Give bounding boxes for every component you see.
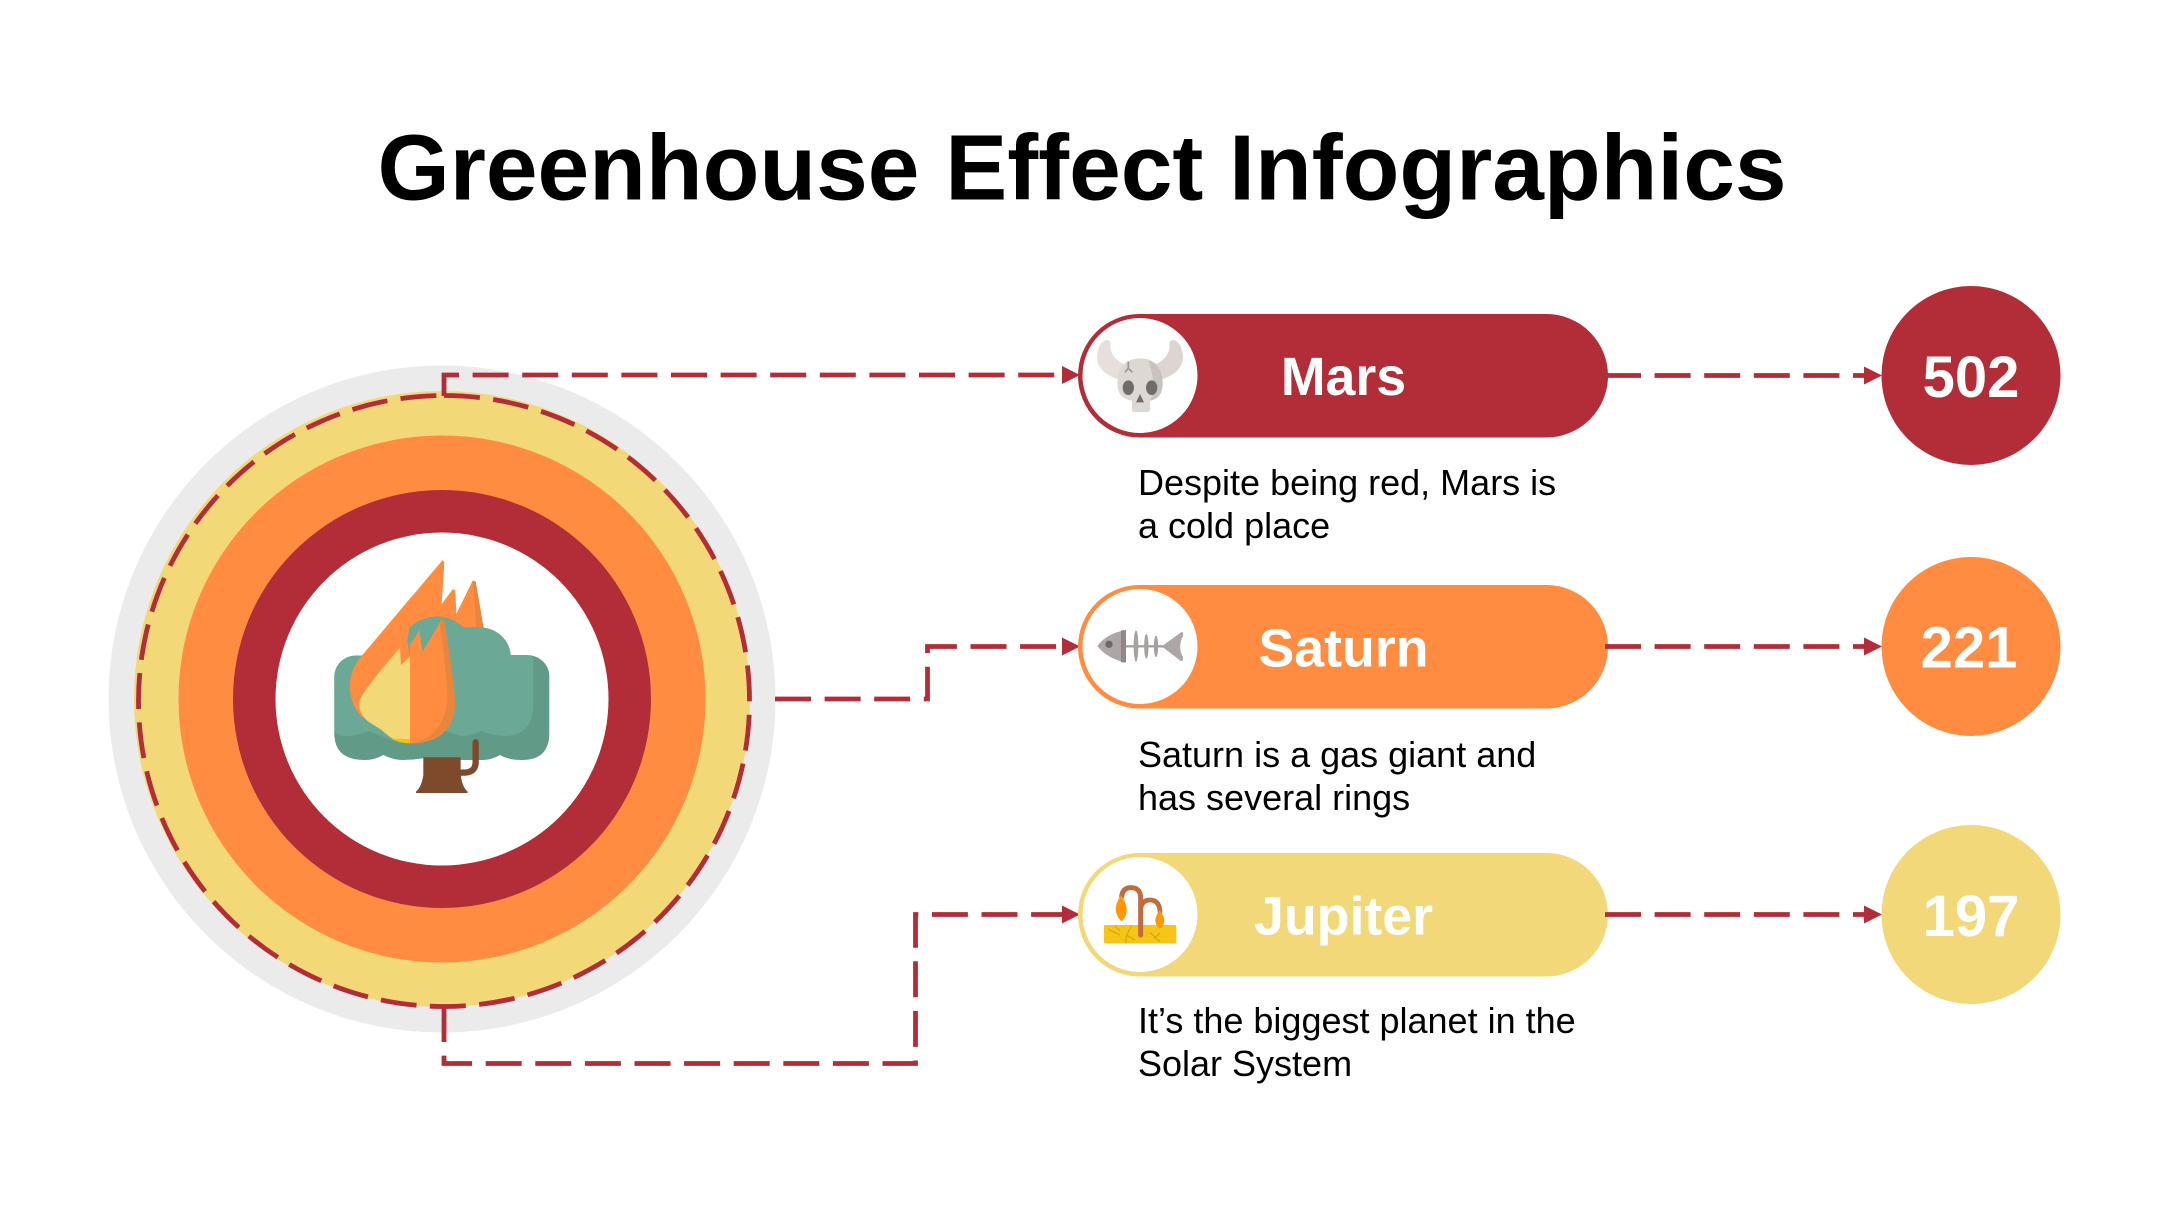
panel: Mars (1078, 286, 2060, 546)
Jupiter description (1138, 1000, 1576, 1084)
Saturn description: has several rings (1138, 777, 1410, 818)
Saturn description (1138, 734, 1536, 818)
Mars value: 502 (1923, 345, 2019, 410)
connector: target to Jupiter (444, 906, 1080, 1064)
Mars description: Despite being red, Mars is (1138, 462, 1556, 503)
Mars connector to value (1605, 366, 1882, 384)
Mars description (1138, 462, 1556, 546)
connector: target to Mars (444, 366, 1080, 396)
Jupiter pill (1078, 853, 1608, 976)
Mars value (1882, 286, 2060, 465)
icon: wilted plant (1082, 857, 1198, 972)
Mars label: Mars (1281, 347, 1406, 407)
Saturn connector to value (1605, 638, 1882, 656)
Jupiter label: Jupiter (1254, 886, 1433, 946)
Saturn value: 221 (1921, 616, 2017, 680)
title: Greenhouse Effect Infographics (377, 116, 1787, 220)
Saturn pill (1078, 585, 1608, 708)
Saturn description: Saturn is a gas giant and (1138, 734, 1536, 775)
icon: horned skull (1082, 318, 1198, 433)
Saturn value (1882, 557, 2060, 736)
Jupiter connector to value (1605, 906, 1882, 924)
panel: Saturn (1078, 557, 2060, 818)
concentric target diagram (108, 366, 776, 1032)
Jupiter value: 197 (1923, 884, 2019, 949)
Saturn label: Saturn (1258, 618, 1429, 678)
panel: Jupiter (1078, 825, 2060, 1084)
icon: burning tree (334, 560, 549, 793)
icon: fish bone (1082, 589, 1198, 704)
Mars description: a cold place (1138, 505, 1330, 546)
Jupiter description: Solar System (1138, 1043, 1352, 1084)
Jupiter value (1882, 825, 2060, 1004)
Jupiter description: It’s the biggest planet in the (1138, 1000, 1576, 1041)
Mars pill (1078, 314, 1608, 438)
connector: target to Saturn (775, 638, 1080, 699)
